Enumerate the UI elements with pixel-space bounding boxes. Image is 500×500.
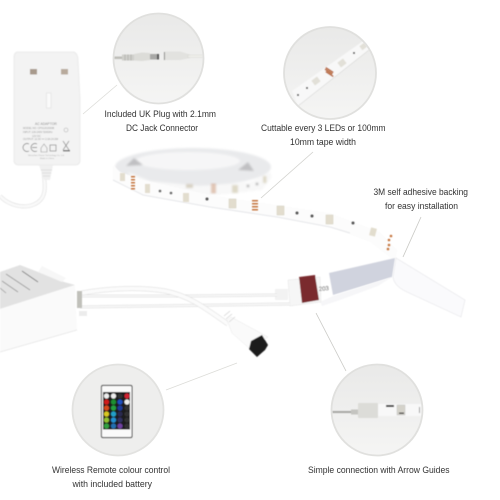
- controller box: [0, 265, 87, 352]
- caption: UK plug: Included UK Plug with 2.1mm: [104, 108, 216, 119]
- controller plug: [224, 311, 268, 357]
- LED strip reel: [113, 148, 465, 317]
- caption: backing: 3M self adhesive backing: [374, 186, 468, 197]
- power adaptor: AC ADAPTOR: [35, 122, 57, 126]
- power adaptor: INPUT: 100-240V 50/60Hz: [23, 131, 53, 134]
- strip front run: [113, 165, 397, 262]
- caption: backing: [374, 186, 468, 211]
- power adaptor: OUTPUT: 12.0V == 2.0A 24.0W: [23, 138, 59, 141]
- power adaptor: Made in China: [40, 158, 55, 160]
- power adaptor: MODEL NO: CPS1202000B: [23, 127, 55, 130]
- caption: remote: [52, 464, 170, 489]
- leader line: remote: [166, 363, 237, 390]
- peeled adhesive backing: [393, 258, 465, 317]
- power adaptor: 12V DC: [32, 135, 41, 138]
- strip connector: [275, 275, 330, 306]
- leader line: connection: [316, 313, 346, 371]
- circle: arrow guide connection: [332, 364, 422, 456]
- leader line: plug: [83, 85, 117, 114]
- leader line: backing: [403, 217, 421, 257]
- backing tape underside: [329, 258, 395, 295]
- remote handset: [102, 386, 132, 438]
- power adaptor: Shenzhen Power Technology Co. Ltd: [28, 154, 65, 157]
- caption: cuttable tape: 10mm tape width: [290, 136, 356, 147]
- circle: DC jack connector: [112, 14, 204, 104]
- strip connector: 203: [319, 286, 330, 293]
- leader line: tape: [261, 152, 313, 198]
- controller and wires: [0, 265, 290, 357]
- caption: cuttable tape: [261, 122, 386, 147]
- caption: cuttable tape: Cuttable every 3 LEDs or 100mm: [261, 122, 386, 133]
- LED chips: [120, 173, 392, 250]
- circle: remote control: [72, 364, 164, 456]
- caption: remote: Wireless Remote colour control: [52, 464, 170, 475]
- caption: UK plug: DC Jack Connector: [126, 122, 198, 133]
- reel coil: [115, 148, 272, 197]
- caption: UK plug: [104, 108, 216, 133]
- wires: [80, 289, 290, 324]
- caption: backing: for easy installation: [385, 200, 458, 211]
- caption: connection: Simple connection with Arrow Guides: [308, 464, 450, 475]
- caption: remote: with included battery: [72, 478, 152, 489]
- power adaptor: [0, 52, 80, 206]
- circle: cuttable tape: [284, 27, 376, 119]
